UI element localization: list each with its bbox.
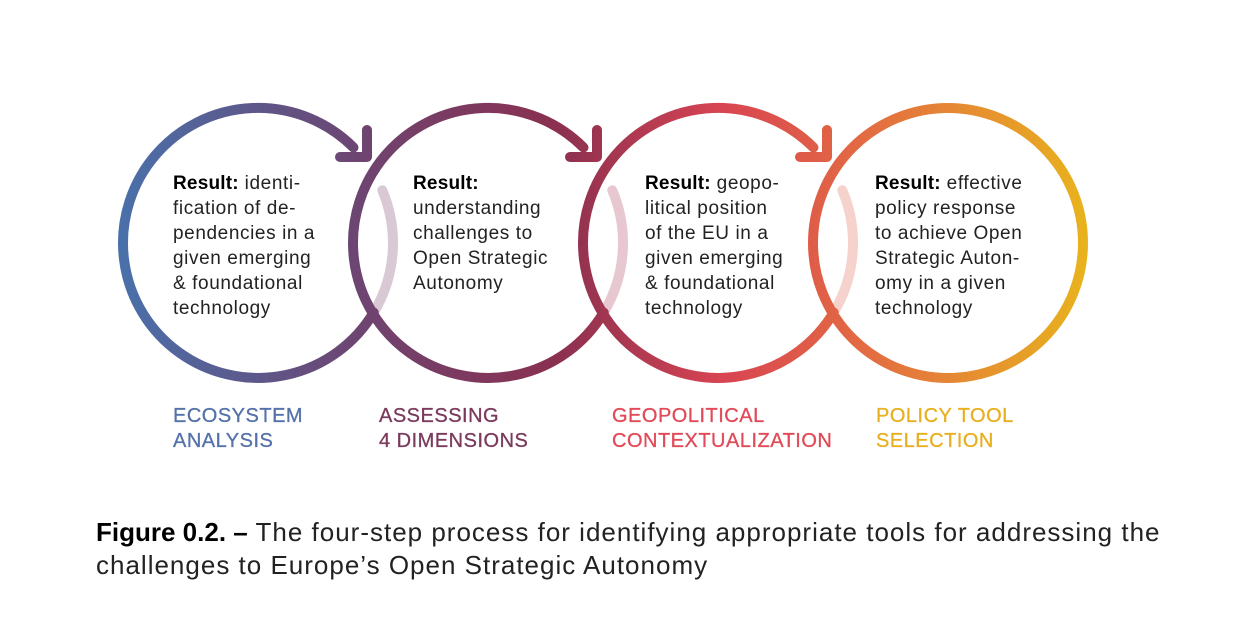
text: result 1: & foundational — [173, 273, 303, 294]
text: result 3 — [645, 173, 783, 319]
text: result 2: Autonomy — [413, 273, 503, 294]
text: result 2: Open Strategic — [413, 248, 548, 269]
label: geopolitical contextualization — [612, 405, 832, 452]
label: assessing 4 dimensions — [378, 405, 528, 452]
text: result 2: understanding — [413, 198, 541, 219]
text: result 3: of the EU in a — [645, 223, 769, 244]
text: result 1: pendencies in a — [173, 223, 315, 244]
label: geopolitical contextualization: CONTEXTUALIZATION — [612, 430, 832, 452]
circle 1 — [123, 108, 393, 378]
text: result 3: litical position — [645, 198, 768, 219]
caption: challenges to Europe’s Open Strategic Autonomy — [96, 550, 708, 580]
text: result 1: technology — [173, 298, 271, 319]
text: result 4: to achieve Open — [875, 223, 1022, 244]
label: ecosystem analysis: ECOSYSTEM — [173, 405, 303, 427]
text: result 2: challenges to — [413, 223, 533, 244]
label: policy tool selection: SELECTION — [876, 430, 994, 452]
label: ecosystem analysis: ANALYSIS — [173, 430, 273, 452]
text: result 1: Result: identi- — [173, 173, 301, 194]
text: result 4: technology — [875, 298, 973, 319]
text: result 3: & foundational — [645, 273, 775, 294]
text: result 3: technology — [645, 298, 743, 319]
text: result 2 — [413, 173, 548, 294]
text: result 3: Result: geopo- — [645, 173, 779, 194]
text: result 4: Strategic Auton- — [875, 248, 1020, 269]
text: result 3: given emerging — [645, 248, 783, 269]
text: result 1 — [173, 173, 315, 319]
label: assessing 4 dimensions: 4 DIMENSIONS — [379, 430, 528, 452]
caption: Figure 0.2. – The four-step process for identifying appropriate tools for addressing the — [96, 517, 1160, 547]
label: geopolitical contextualization: GEOPOLITICAL — [612, 405, 765, 427]
text: result 1: given emerging — [173, 248, 311, 269]
text: result 4: policy response — [875, 198, 1016, 219]
label: policy tool selection: POLICY TOOL — [876, 405, 1014, 427]
text: result 4: omy in a given — [875, 273, 1006, 294]
caption — [96, 517, 1160, 580]
circle 2 — [353, 108, 623, 378]
circle 4 — [813, 108, 1083, 378]
label: policy tool selection — [876, 405, 1014, 452]
text: result 4: Result: effective — [875, 173, 1022, 194]
text: result 1: fication of de- — [173, 198, 296, 219]
label: ecosystem analysis — [172, 405, 303, 452]
text: result 2: Result: — [413, 173, 479, 194]
circle 3 — [583, 108, 853, 378]
text: result 4 — [875, 173, 1022, 319]
label: assessing 4 dimensions: ASSESSING — [379, 405, 499, 427]
